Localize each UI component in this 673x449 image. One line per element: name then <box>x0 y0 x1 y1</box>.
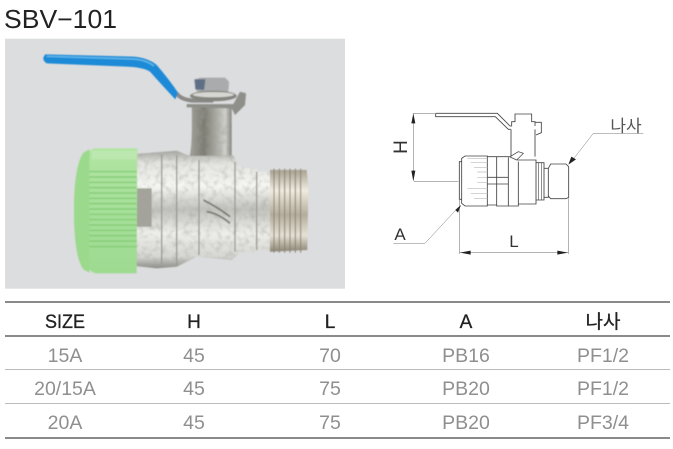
label L: L <box>509 232 519 251</box>
table header: 나사 <box>586 311 620 333</box>
row 20A <box>48 412 629 434</box>
chrome valve body <box>135 151 270 268</box>
green PB cap with ribs <box>74 148 137 273</box>
row 20A: 20A <box>48 412 82 434</box>
row 20A: PB20 <box>442 412 490 434</box>
table header: L <box>325 312 335 333</box>
row 20/15A <box>34 378 629 400</box>
label A: A <box>394 225 406 244</box>
row 20/15A: PF1/2 <box>577 378 629 400</box>
label thread: 나사 <box>610 117 642 136</box>
title: SBV−101 <box>4 4 117 34</box>
threaded end <box>536 163 569 200</box>
table header: H <box>187 312 201 333</box>
technical drawing of valve with dimensions <box>393 113 643 255</box>
neck outline <box>511 129 535 157</box>
row 15A <box>48 345 629 367</box>
row 20A: 45 <box>183 412 205 434</box>
spec table <box>5 301 670 439</box>
lever outline <box>436 113 541 135</box>
threaded male end <box>270 169 308 253</box>
hex nut and stem top <box>187 78 246 115</box>
row 20/15A: 75 <box>319 378 341 400</box>
dimension H <box>411 113 458 181</box>
table header: A <box>460 312 473 333</box>
row 20A: 75 <box>319 412 341 434</box>
body outline <box>487 157 536 206</box>
label H: H <box>391 140 412 154</box>
table header <box>45 311 620 333</box>
row 20/15A: 20/15A <box>34 378 96 400</box>
panel: product photo of ball valve <box>5 39 345 289</box>
neck of valve <box>189 105 232 157</box>
icon: blue lever handle <box>43 54 213 101</box>
row 15A: 45 <box>183 345 205 367</box>
leader A <box>393 205 461 243</box>
row 20/15A: 45 <box>183 378 205 400</box>
row 20A: PF3/4 <box>577 412 629 434</box>
dimension L <box>459 198 568 255</box>
cap A outline and ribs <box>459 156 487 206</box>
leader thread <box>568 133 643 165</box>
row 20/15A: PB20 <box>442 378 490 400</box>
row 15A: PB16 <box>442 345 490 367</box>
row 15A: PF1/2 <box>577 345 629 367</box>
row 15A: 15A <box>48 345 82 367</box>
table header: SIZE <box>45 312 85 333</box>
row 15A: 70 <box>319 345 341 367</box>
